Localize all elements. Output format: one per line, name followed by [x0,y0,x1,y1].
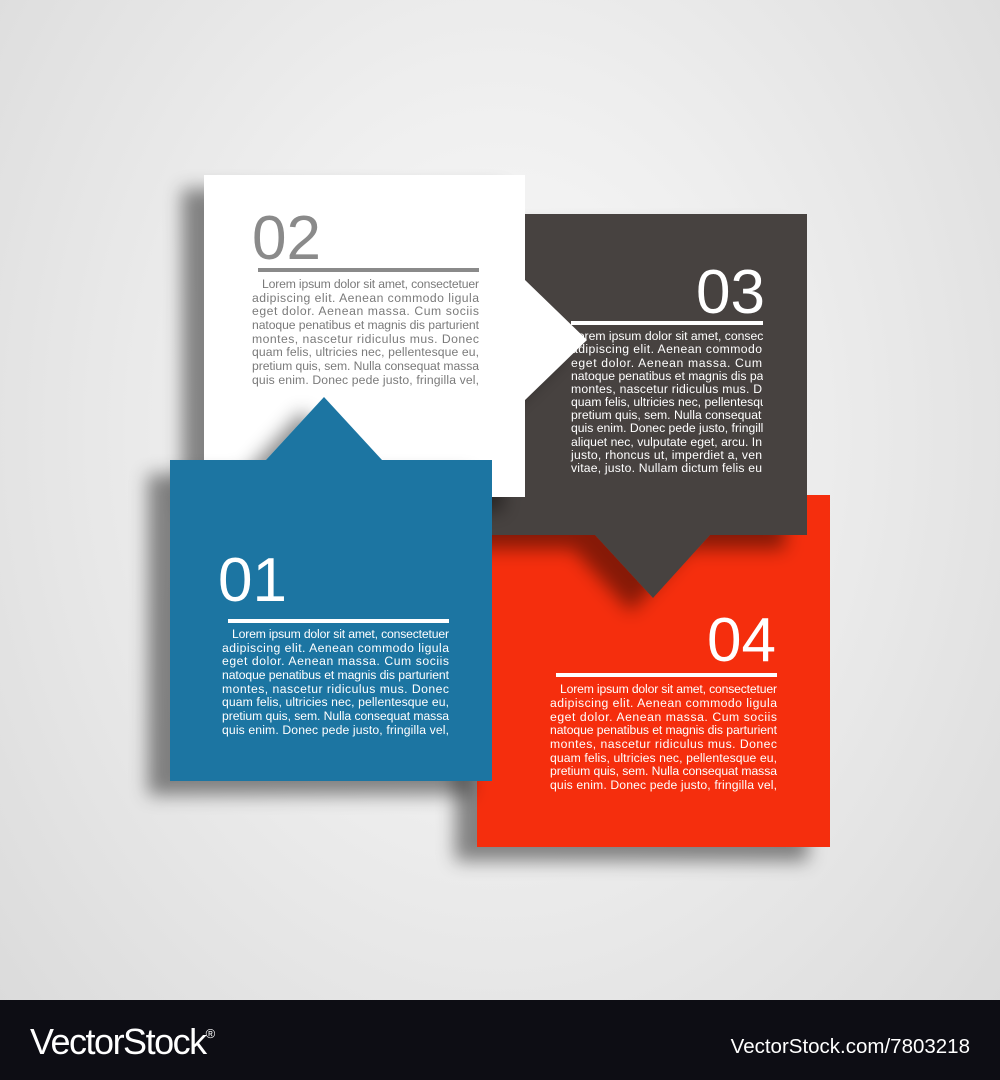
text 01: quis enim. Donec pede justo, fringilla vel, [222,723,449,737]
text 03: quam felis, ultricies nec, pellentesque eu, [571,395,794,409]
text 03 [570,331,763,474]
text 02: quis enim. Donec pede justo, fringilla vel, [252,373,479,387]
text 02: quam felis, ultricies nec, pellentesque eu, [252,345,479,359]
text 04: eget dolor. Aenean massa. Cum sociis [550,710,777,724]
text 03: justo, rhoncus ut, imperdiet a, ven [570,448,762,462]
text 03: vitae, justo. Nullam dictum felis eu [571,461,762,475]
text 04 [550,682,778,792]
text 02: eget dolor. Aenean massa. Cum sociis [252,304,479,318]
footer logo: VectorStock [30,1021,206,1062]
text 03: Lorem ipsum dolor sit amet, consectetuer [571,329,795,343]
number 04: 04 [707,606,776,675]
text 04: natoque penatibus et magnis dis parturient [550,723,778,737]
number 02: 02 [252,204,321,273]
number 01: 01 [218,546,287,615]
text 03: aliquet nec, vulputate eget, arcu. In [571,435,762,449]
panel 04: red [477,495,830,847]
text 02: natoque penatibus et magnis dis parturient [252,318,480,332]
text 01: montes, nascetur ridiculus mus. Donec [222,682,449,696]
text 04: montes, nascetur ridiculus mus. Donec [550,737,777,751]
text 02 [252,277,480,387]
text 01: eget dolor. Aenean massa. Cum sociis [222,654,449,668]
text 01: adipiscing elit. Aenean commodo ligula [222,641,449,655]
text 01: natoque penatibus et magnis dis parturient [222,668,450,682]
panel 02: white [204,175,587,497]
text 01: pretium quis, sem. Nulla consequat massa [222,709,449,723]
text 01: quam felis, ultricies nec, pellentesque eu, [222,695,449,709]
text 02: montes, nascetur ridiculus mus. Donec [252,332,479,346]
text 03: adipiscing elit. Aenean commodo [571,342,762,356]
text 03: natoque penatibus et magnis dis parturient [571,369,802,383]
panel 01: blue [170,397,492,781]
text 01 [222,627,450,737]
text 03: pretium quis, sem. Nulla consequat massa [571,408,801,422]
text 04: pretium quis, sem. Nulla consequat massa [550,764,777,778]
text 03: montes, nascetur ridiculus mus. D [571,382,762,396]
text 01: Lorem ipsum dolor sit amet, consectetuer [232,627,449,641]
number 03: 03 [696,258,765,327]
footer url: VectorStock.com/7803218 [731,1035,970,1058]
text 03: quis enim. Donec pede justo, fringilla vel, [571,421,793,435]
panel 03: dark [490,214,807,598]
text 04: quis enim. Donec pede justo, fringilla vel, [550,778,777,792]
text 04: quam felis, ultricies nec, pellentesque eu, [550,751,777,765]
footer bar [0,1000,1000,1080]
text 03: eget dolor. Aenean massa. Cum [571,356,762,370]
text 02: Lorem ipsum dolor sit amet, consectetuer [262,277,479,291]
footer logo: ® [206,1026,216,1041]
text 04: Lorem ipsum dolor sit amet, consectetuer [560,682,777,696]
text 04: adipiscing elit. Aenean commodo ligula [550,696,777,710]
text 02: adipiscing elit. Aenean commodo ligula [252,291,479,305]
text 02: pretium quis, sem. Nulla consequat massa [252,359,479,373]
